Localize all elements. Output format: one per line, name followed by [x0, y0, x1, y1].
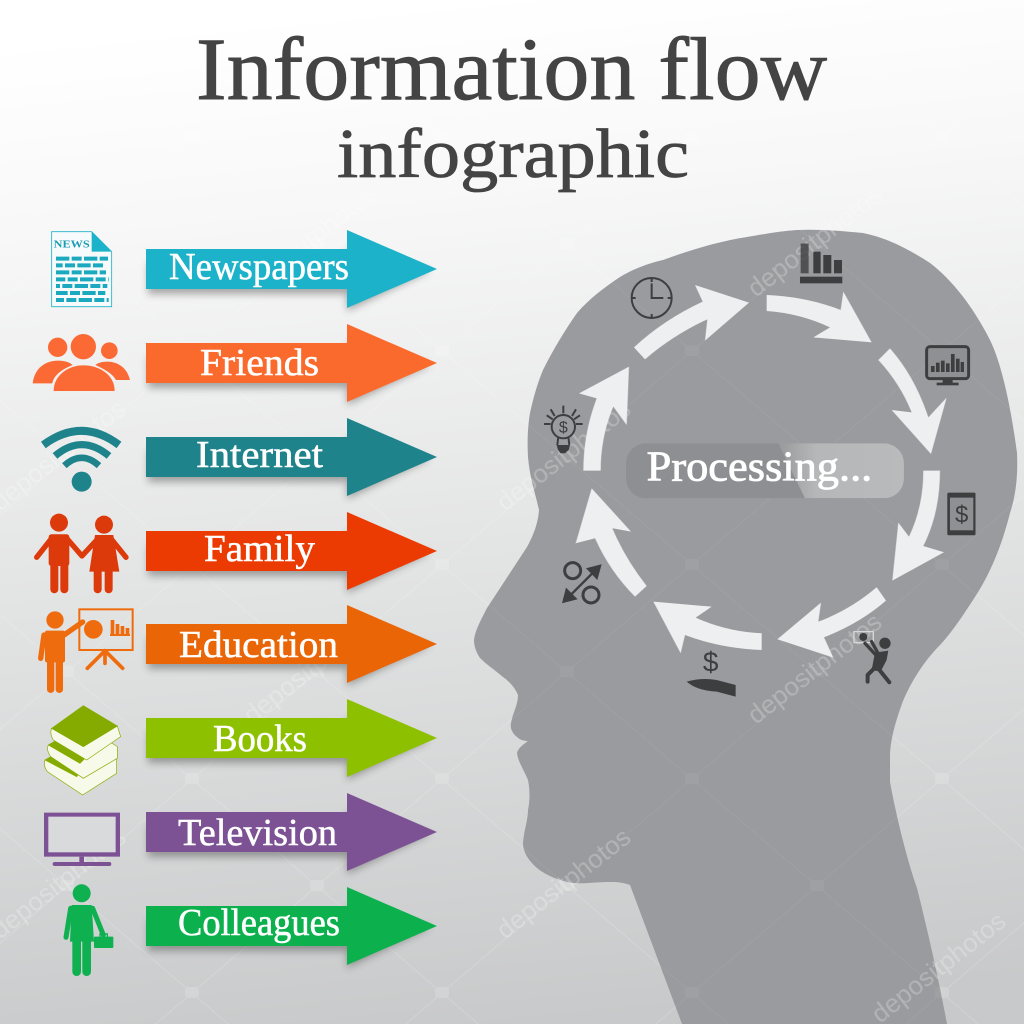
icon: television — [44, 813, 120, 866]
processing bar — [626, 443, 904, 498]
icon: tablet with dollar — [947, 493, 976, 535]
arrow: Internet: Internet — [196, 434, 323, 476]
arrow: Newspapers — [146, 230, 437, 311]
processing bar: Processing... — [647, 444, 872, 491]
arrow: Family — [146, 512, 437, 593]
icon: light bulb — [544, 406, 583, 453]
arrow: Colleagues: Colleagues — [178, 902, 340, 944]
icon: tablet with dollar: $ — [955, 502, 968, 529]
icon: monitor — [927, 347, 969, 385]
icon: clock — [632, 278, 672, 318]
arrow: Education: Education — [179, 624, 338, 666]
arrow: Family: Family — [204, 528, 315, 570]
icon: wifi — [43, 431, 119, 492]
watermark text: depositphotos — [237, 606, 383, 730]
arrow: Television: Television — [178, 812, 337, 854]
icon: newspaper — [52, 232, 112, 307]
icon: light bulb: $ — [559, 419, 568, 436]
icon: hand with dollar: $ — [703, 647, 719, 678]
icon: stack of books — [44, 706, 121, 795]
arrow: Books — [146, 699, 437, 780]
icon: newspaper: NEWS — [54, 240, 90, 251]
watermark text: depositphotos — [490, 821, 636, 945]
watermark text: depositphotos — [237, 177, 383, 301]
watermark text: depositphotos — [741, 179, 887, 303]
processing cycle — [544, 243, 976, 697]
arrow: Education — [146, 605, 437, 686]
title: Information flow — [196, 21, 827, 119]
icon: friends group — [33, 334, 130, 391]
icon: bar chart — [800, 243, 842, 283]
watermark text: depositphotos — [741, 606, 887, 730]
arrow: Friends — [146, 324, 437, 405]
icon: hand with dollar — [687, 647, 736, 697]
cycle arrows — [576, 285, 947, 658]
arrow: Colleagues — [146, 887, 437, 968]
icon: percent arrow — [562, 563, 602, 603]
subtitle: infographic — [337, 116, 689, 193]
arrow: Internet — [146, 418, 437, 499]
arrow: Books: Books — [213, 718, 307, 760]
arrow: Friends: Friends — [200, 342, 319, 384]
watermark text: depositphotos — [490, 393, 636, 517]
icon: man with money — [854, 632, 891, 682]
icon: colleague with briefcase — [66, 884, 113, 972]
arrow: Newspapers: Newspapers — [169, 246, 349, 288]
icon: teacher at board — [41, 609, 133, 689]
icon: family couple — [37, 514, 126, 589]
head silhouette — [474, 230, 1017, 1024]
arrow: Television — [146, 793, 437, 874]
